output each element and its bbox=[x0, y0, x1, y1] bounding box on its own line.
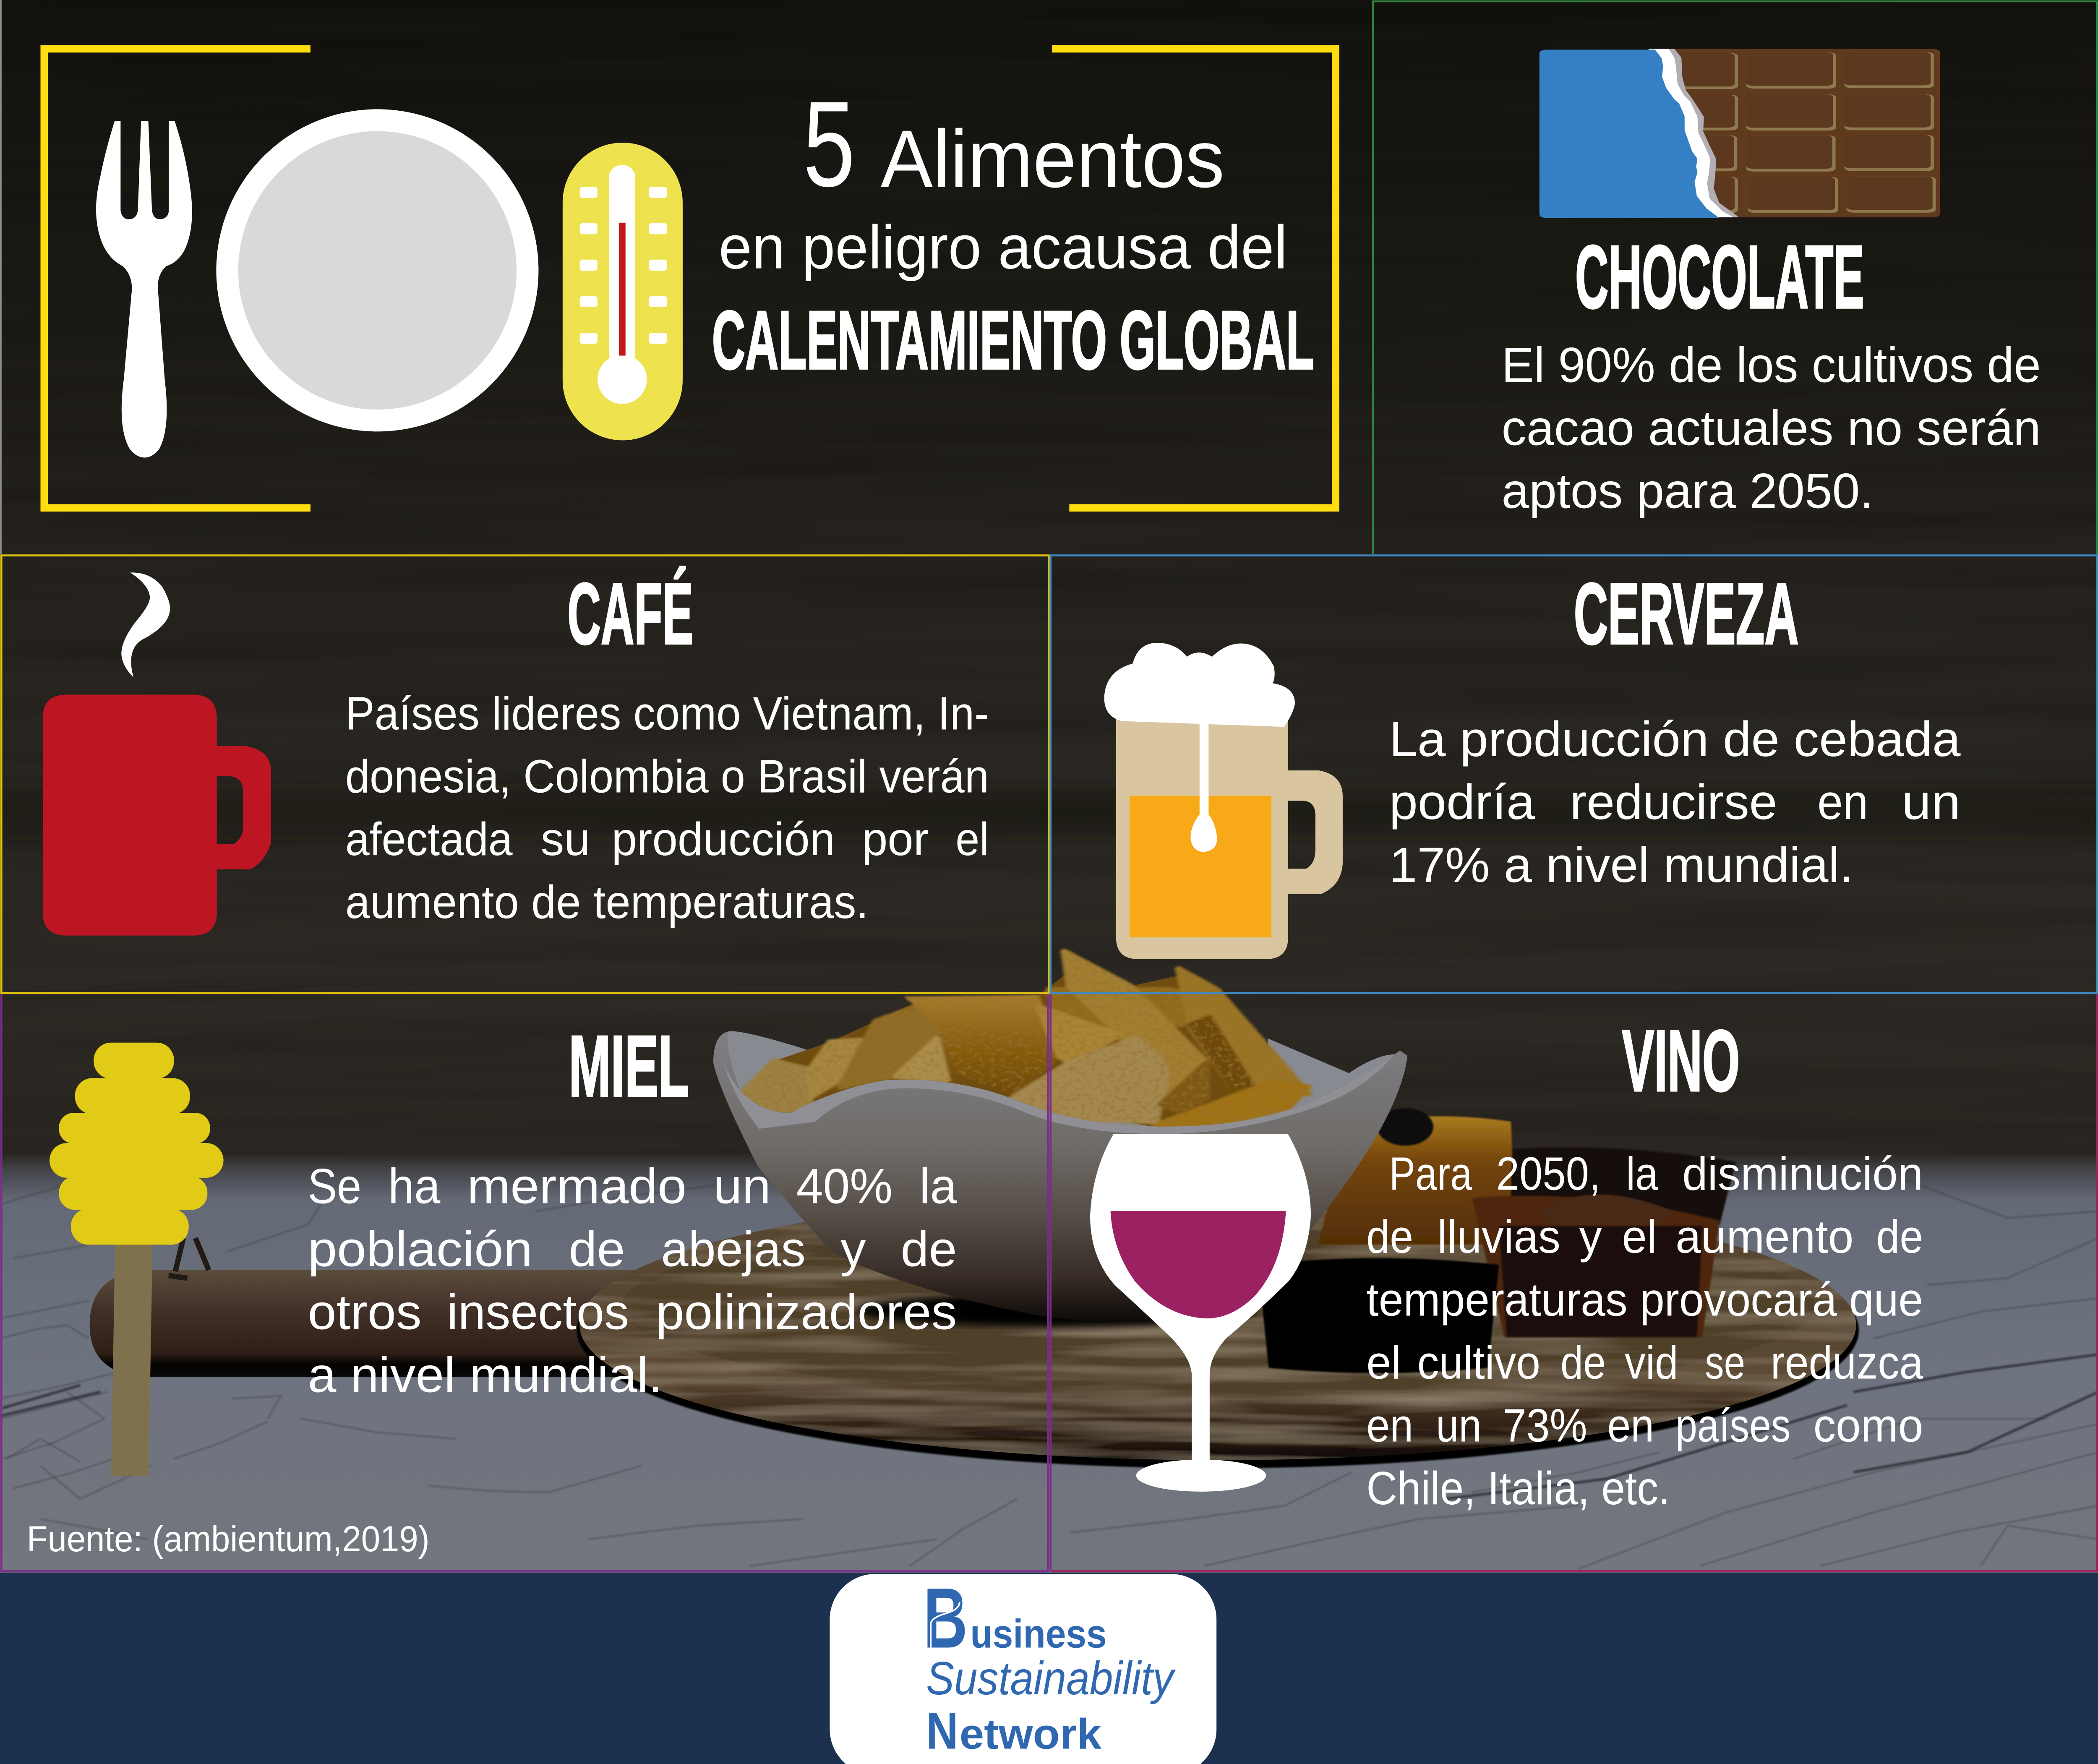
text: cafe: donesia, Colombia o Brasil verán bbox=[345, 750, 989, 802]
text: cafe: el bbox=[955, 813, 989, 865]
text: vino: lluvias bbox=[1437, 1211, 1560, 1263]
text: vino: países bbox=[1675, 1399, 1790, 1451]
text: vino: en bbox=[1607, 1399, 1654, 1451]
text: chocolate: cacao actuales no serán bbox=[1502, 401, 2041, 456]
panel: vino bbox=[1051, 994, 2097, 1571]
text: vino: de bbox=[1560, 1336, 1606, 1388]
heading: cafe: CAFÉ bbox=[567, 565, 693, 662]
text: vino: y bbox=[1579, 1211, 1602, 1263]
text: miel: un bbox=[713, 1159, 771, 1214]
board shadow and body bbox=[90, 1270, 749, 1377]
icon: fork bbox=[96, 121, 192, 458]
text: chocolate bbox=[1502, 338, 2041, 519]
heading: cerveza: CERVEZA bbox=[1574, 565, 1799, 662]
text: cafe: aumento de temperaturas. bbox=[345, 876, 869, 928]
tiny figure bbox=[169, 1238, 209, 1278]
text: miel: y bbox=[840, 1221, 866, 1277]
text: miel: 40% bbox=[796, 1159, 892, 1214]
text: vino: el bbox=[1366, 1336, 1401, 1388]
text: vino: cultivo bbox=[1417, 1336, 1540, 1388]
text: vino: en bbox=[1366, 1399, 1413, 1451]
icon: coffee steam bbox=[121, 572, 170, 677]
source note: Fuente: (ambientum,2019) bbox=[27, 1519, 430, 1559]
text: miel: de bbox=[900, 1221, 957, 1277]
text: vino: disminución bbox=[1682, 1148, 1923, 1200]
logo: Business Sustainability Network: B bbox=[924, 1570, 968, 1666]
text: miel: población bbox=[308, 1221, 532, 1277]
text: cerveza bbox=[1389, 712, 1961, 893]
text: miel: mermado bbox=[467, 1159, 686, 1214]
logo: Business Sustainability Network: Sustainability bbox=[926, 1652, 1176, 1704]
footer band bbox=[0, 1573, 2098, 1764]
text: miel: insectos bbox=[447, 1284, 629, 1340]
text: cerveza: La producción de cebada bbox=[1389, 712, 1961, 767]
text: cafe: su bbox=[541, 813, 590, 865]
logo: Business Sustainability Network bbox=[0, 1570, 2098, 1764]
text: vino: como bbox=[1814, 1399, 1923, 1451]
text: vino: un bbox=[1436, 1399, 1482, 1451]
icon: chocolate bar bbox=[1540, 49, 1940, 218]
text: cerveza: en bbox=[1817, 775, 1868, 830]
text: vino: de bbox=[1876, 1211, 1923, 1263]
text: miel: polinizadores bbox=[656, 1284, 957, 1340]
text: miel: de bbox=[569, 1221, 625, 1277]
text: chocolate: aptos para 2050. bbox=[1502, 463, 1874, 519]
panel: title bbox=[1, 0, 1336, 554]
panel: chocolate bbox=[1373, 1, 2097, 554]
title text: en peligro acausa del bbox=[719, 213, 1287, 282]
text: cerveza: reducirse bbox=[1570, 775, 1777, 830]
text: vino: 73% bbox=[1503, 1399, 1587, 1451]
text: miel: ha bbox=[388, 1159, 441, 1214]
text: vino: temperaturas provocará que bbox=[1366, 1273, 1923, 1326]
text: cerveza: un bbox=[1902, 775, 1960, 830]
text: vino: Chile, Italia, etc. bbox=[1366, 1462, 1670, 1514]
text: miel: abejas bbox=[661, 1221, 806, 1277]
text: vino: vid bbox=[1625, 1336, 1678, 1388]
text: cafe: producción bbox=[612, 813, 835, 865]
logo: Business Sustainability Network: usiness bbox=[970, 1611, 1107, 1656]
text: vino: reduzca bbox=[1771, 1336, 1923, 1388]
logo: Business Sustainability Network: N bbox=[926, 1701, 958, 1760]
panel: cafe bbox=[1, 556, 1049, 993]
bowl and fries bbox=[713, 951, 1407, 1322]
title text: 5 bbox=[803, 76, 855, 212]
panel: miel bbox=[1, 994, 1048, 1571]
text: cerveza: 17% a nivel mundial. bbox=[1389, 838, 1853, 893]
title text bbox=[712, 76, 1314, 386]
heading: vino: VINO bbox=[1622, 1012, 1740, 1109]
text: vino: de bbox=[1366, 1211, 1413, 1263]
icon: thermometer bbox=[563, 143, 683, 440]
heading: miel: MIEL bbox=[569, 1017, 689, 1114]
text: vino bbox=[1366, 1148, 1923, 1514]
dishes bbox=[1484, 1148, 1736, 1225]
text: vino: el bbox=[1622, 1211, 1657, 1263]
text: cafe: Países lideres como Vietnam, In- bbox=[345, 687, 989, 739]
title text: Alimentos bbox=[881, 114, 1224, 205]
icon: plate bbox=[216, 109, 538, 431]
text: vino: la bbox=[1626, 1148, 1658, 1200]
text: cafe: afectada bbox=[345, 813, 513, 865]
icon: beer mug bbox=[1104, 643, 1343, 959]
text: miel: Se bbox=[308, 1159, 361, 1214]
text: vino: Para bbox=[1389, 1148, 1472, 1200]
logo: Business Sustainability Network: etwork bbox=[960, 1710, 1101, 1758]
title text: CALENTAMIENTO GLOBAL bbox=[712, 294, 1314, 386]
icon: coffee mug bbox=[43, 694, 271, 936]
panel: cerveza bbox=[1051, 556, 2097, 993]
text: vino: se bbox=[1705, 1336, 1745, 1388]
text: cerveza: podría bbox=[1389, 775, 1535, 830]
text: miel bbox=[308, 1159, 957, 1403]
text: cafe bbox=[345, 687, 989, 928]
text: vino: aumento bbox=[1675, 1211, 1853, 1263]
text: cafe: por bbox=[862, 813, 929, 865]
text: miel: otros bbox=[308, 1284, 422, 1340]
text: miel: la bbox=[919, 1159, 957, 1214]
text: chocolate: El 90% de los cultivos de bbox=[1502, 338, 2041, 393]
icon: wine glass bbox=[1090, 1134, 1311, 1492]
icon: honey dipper bbox=[50, 1043, 224, 1476]
text: vino: 2050, bbox=[1496, 1148, 1601, 1200]
title frame bbox=[44, 49, 1336, 508]
text: miel: a nivel mundial. bbox=[308, 1347, 663, 1403]
